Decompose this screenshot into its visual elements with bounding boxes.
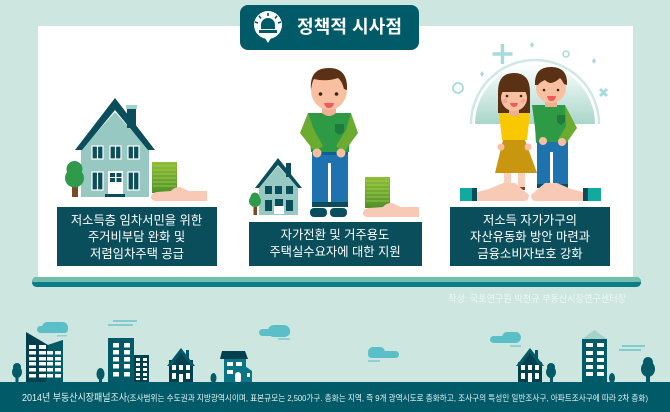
dome xyxy=(471,60,599,124)
house walls xyxy=(81,112,149,197)
caption box 1 xyxy=(57,207,217,266)
author credit: 작성: 국토연구원 박천규 부동산시장연구센터장 xyxy=(448,294,626,305)
man xyxy=(300,68,358,217)
tree xyxy=(641,357,655,383)
caption box 2 xyxy=(249,222,422,266)
caption box 1: 저소득층 임차서민을 위한 xyxy=(71,214,202,228)
right supporting hand xyxy=(531,183,601,201)
panel base bar xyxy=(32,277,641,287)
cloud line xyxy=(108,321,137,325)
title text: 정책적 시사점 xyxy=(297,17,402,37)
office building xyxy=(26,332,63,382)
tree xyxy=(12,363,22,383)
caption box 3 xyxy=(450,207,610,266)
caption box 2: 주택실수요자에 대한 지원 xyxy=(269,245,401,259)
icon: siren xyxy=(254,11,282,43)
cloud 1 xyxy=(37,322,68,336)
illustration: large house with tree and money xyxy=(65,98,207,201)
panel: white content card xyxy=(38,26,633,278)
tree xyxy=(609,373,615,383)
illustration: couple under dome with hands xyxy=(453,42,607,201)
apartment block xyxy=(108,338,149,383)
caption box 1: 저렴임차주택 공급 xyxy=(90,247,184,261)
caption box 1: 주거비부담 완화 및 xyxy=(88,230,185,244)
money stack xyxy=(152,162,177,193)
cloud line right xyxy=(619,346,645,350)
cloud 3 xyxy=(368,347,399,362)
house right xyxy=(516,348,544,383)
caption box 3: 자산유동화 방안 마련과 xyxy=(470,230,590,244)
small house xyxy=(167,348,195,383)
tree xyxy=(210,373,216,383)
tree xyxy=(96,368,104,383)
icon: small house xyxy=(249,158,302,215)
footer band xyxy=(0,382,670,412)
hand xyxy=(151,187,207,201)
skyline scene xyxy=(12,321,655,383)
cloud 4 xyxy=(490,332,521,347)
tower xyxy=(582,330,607,383)
money stack xyxy=(365,177,390,208)
caption box 3: 저소득 자가가구의 xyxy=(483,214,577,228)
woman xyxy=(495,73,537,190)
tree xyxy=(546,363,556,383)
hand xyxy=(363,203,419,217)
decorative symbols xyxy=(453,42,607,96)
left supporting hand xyxy=(460,183,529,201)
man xyxy=(532,67,577,188)
icon: tree xyxy=(65,161,84,197)
caption box 2: 자가전환 및 거주용도 xyxy=(281,228,389,242)
roof xyxy=(75,98,155,150)
title badge xyxy=(240,5,419,50)
illustration: man with small house and money xyxy=(249,68,419,217)
townhouse xyxy=(220,351,252,383)
cloud 2 xyxy=(259,325,290,340)
caption box 3: 금융소비자보호 강화 xyxy=(477,247,583,261)
